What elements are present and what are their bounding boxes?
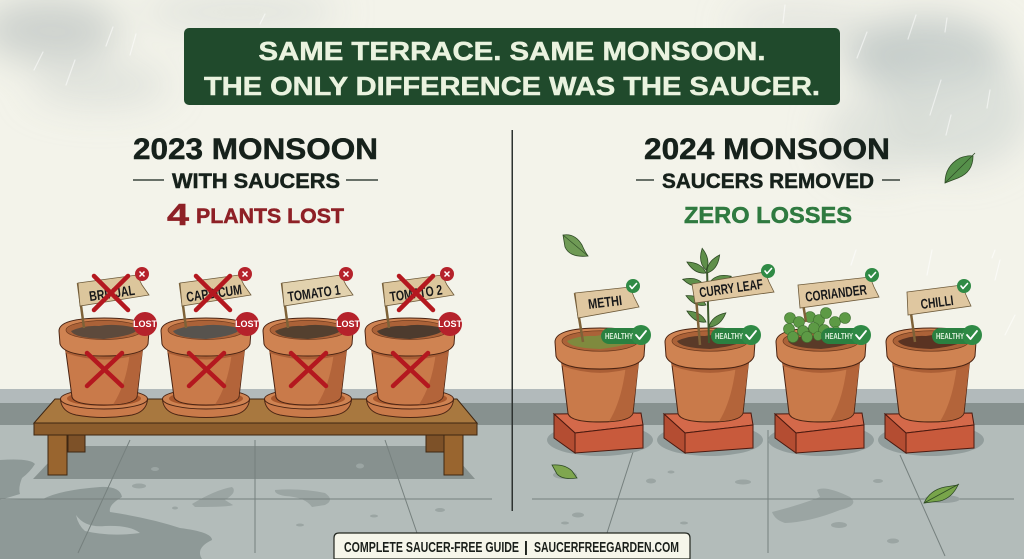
footer label: [334, 533, 690, 559]
coriander foliage: [784, 308, 850, 342]
plant 3: tomato 1, lost: LOST: [336, 319, 361, 329]
flag: coriander: CORIANDER: [804, 281, 868, 305]
plant 2: capsicum, lost: LOST: [235, 319, 260, 329]
title banner: THE ONLY DIFFERENCE WAS THE SAUCER.: [204, 71, 820, 101]
plant 1: brinjal, lost: [59, 267, 158, 418]
small puddles: [132, 464, 899, 544]
title banner: [184, 28, 840, 105]
badge: healthy: [932, 325, 982, 345]
flag: brinjal: BRINJAL: [88, 282, 136, 304]
heading: 2024 monsoon: SAUCERS REMOVED: [662, 170, 874, 193]
stat: 4 plants lost: [167, 197, 344, 232]
flag: tomato 2: TOMATO 2: [389, 281, 444, 305]
rain clouds: [0, 0, 1024, 177]
heading: 2023 monsoon: 2023 MONSOON: [133, 133, 378, 166]
flag: tomato 2: [383, 275, 454, 328]
badge: healthy: [711, 325, 761, 345]
puddle highlight: [76, 515, 140, 535]
flag: methi: METHI: [587, 292, 623, 312]
fallen leaf: front left: [552, 465, 577, 479]
floor tile joints: [0, 430, 1014, 556]
stat: zero losses: ZERO LOSSES: [684, 202, 852, 228]
plant 4: tomato 2, lost: LOST: [438, 319, 463, 329]
badge: healthy: HEALTHY: [936, 331, 964, 341]
curry leaf plant: [682, 248, 732, 343]
plant 5: methi, healthy: [547, 279, 653, 456]
footer label: SAUCERFREEGARDEN.COM: [534, 539, 679, 556]
sky background: [0, 0, 1024, 400]
plant 2: capsicum, lost: [161, 267, 260, 418]
terrace wall ledge: [0, 389, 1024, 425]
wooden bench: [34, 399, 477, 475]
heading: 2024 monsoon: 2024 MONSOON: [644, 133, 890, 166]
flag: curry leaf: CURRY LEAF: [698, 276, 764, 300]
plant 8: chilli, healthy: [878, 279, 984, 456]
plant 6: curry leaf, healthy: [657, 248, 775, 456]
flag: methi: [575, 287, 639, 342]
plant 1: brinjal, lost: LOST: [133, 319, 158, 329]
stat: 4 plants lost: 4: [167, 197, 190, 232]
badge: healthy: HEALTHY: [715, 331, 743, 341]
heading: 2023 monsoon: [133, 133, 378, 193]
plant 3: tomato 1, lost: [263, 267, 361, 418]
stat: 4 plants lost: PLANTS LOST: [196, 205, 344, 228]
flag: chilli: [907, 285, 971, 342]
flag: brinjal: [78, 275, 149, 328]
flag: coriander: [798, 277, 879, 322]
plant 4: tomato 2, lost: [365, 267, 463, 418]
terrace floor: [0, 425, 1024, 559]
fallen leaf: front right: [924, 484, 960, 503]
badge: healthy: [601, 325, 651, 345]
centre divider: [512, 130, 513, 511]
badge: healthy: [821, 325, 871, 345]
flag: chilli: CHILLI: [920, 292, 954, 312]
falling leaf: top right: [945, 153, 975, 183]
title banner: SAME TERRACE. SAME MONSOON.: [258, 36, 766, 66]
flag: tomato 1: TOMATO 1: [287, 281, 342, 305]
puddle left: [0, 460, 212, 559]
footer label: |: [524, 539, 528, 556]
heading: 2023 monsoon: WITH SAUCERS: [172, 170, 340, 193]
flag: curry leaf: [692, 272, 774, 345]
heading: 2024 monsoon: [636, 133, 900, 193]
flag: capsicum: [180, 275, 251, 328]
footer label: COMPLETE SAUCER-FREE GUIDE: [344, 539, 519, 556]
falling leaf: left of pots: [563, 235, 588, 256]
badge: healthy: HEALTHY: [605, 331, 633, 341]
flag: capsicum: CAPSICUM: [185, 281, 243, 305]
badge: healthy: HEALTHY: [825, 331, 853, 341]
flag: tomato 1: [282, 275, 353, 328]
plant 7: coriander, healthy: [768, 268, 879, 456]
